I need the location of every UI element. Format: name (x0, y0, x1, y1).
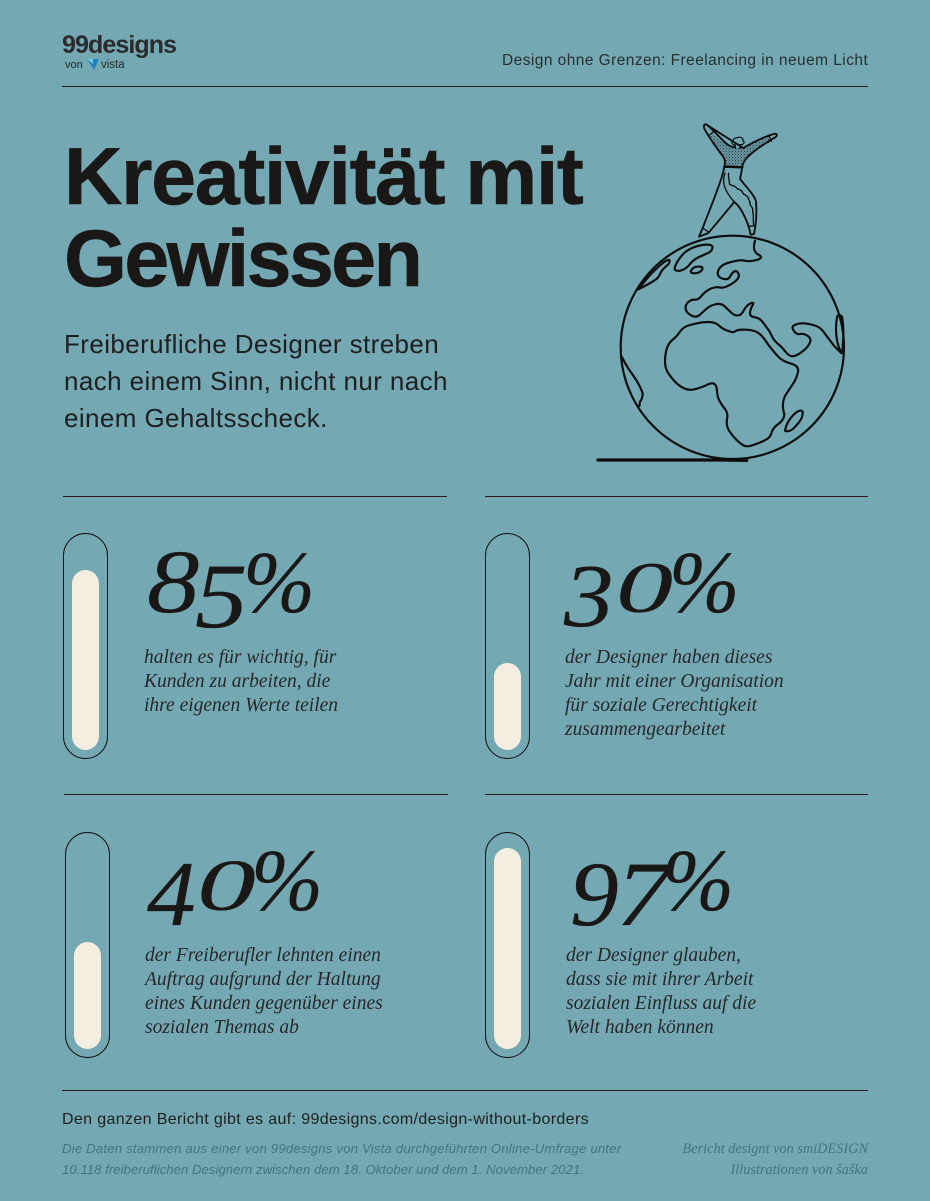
logo subline: von (65, 59, 83, 71)
logo wordmark: 99designs (62, 31, 176, 59)
progress tube 40 (65, 832, 110, 1058)
wrist bands (709, 131, 771, 141)
sweater (711, 134, 772, 167)
big number 40% (147, 831, 323, 945)
icon: vista mark (87, 59, 99, 70)
subtitle: einem Gehaltsscheck. (64, 403, 328, 433)
stat panel: 40% (64, 794, 448, 1058)
shoe lines (703, 226, 755, 232)
stat text 85: ihre eigenen Werte teilen (144, 695, 338, 716)
progress tube 30 (485, 533, 530, 759)
data source note: Die Daten stammen aus einer von 99designs von Vista durchgeführten Online-Umfrage unter (62, 1141, 621, 1156)
neck (735, 145, 740, 149)
big number 85%: 5 (195, 545, 247, 647)
subtitle: Freiberufliche Designer streben (64, 329, 439, 359)
wavy seam (728, 173, 754, 225)
progress tube 85 (63, 533, 108, 759)
figure (699, 124, 777, 237)
big number 97%: % (662, 831, 734, 929)
stat panel: 97% (485, 794, 868, 1058)
stat text 40 (144, 945, 383, 1038)
continents (622, 241, 843, 446)
data source note: 10.118 freiberuflichen Designern zwischen dem 18. Oktober und dem 1. November 2021. (62, 1162, 584, 1177)
subtitle (64, 329, 448, 433)
stat text 40: sozialen Themas ab (145, 1017, 299, 1038)
Madagascar (785, 411, 803, 431)
stat text 97 (566, 945, 756, 1038)
stat text 40: eines Kunden gegenüber eines (145, 993, 383, 1014)
Africa (665, 322, 798, 446)
hair (732, 137, 744, 145)
progress fill 30 (494, 663, 521, 750)
report link: Den ganzen Bericht gibt es auf: 99designs.com/design-without-borders (62, 1111, 589, 1128)
stat text 97: der Designer glauben, (566, 945, 741, 966)
stat text 30: zusammengearbeitet (565, 719, 725, 740)
big number 97% (570, 831, 734, 945)
big number 40%: % (251, 831, 323, 929)
stat panel: 30% (485, 496, 868, 759)
logo vista text: vista (101, 59, 125, 71)
big number 85%: % (243, 533, 315, 631)
credits (682, 1141, 868, 1178)
stat text 85 (144, 647, 338, 716)
progress tube 97 (485, 832, 530, 1058)
arms outline (704, 124, 777, 167)
credits: Bericht designt von smiDESIGN (683, 1141, 868, 1157)
Greenland (675, 245, 712, 271)
inner leg line (724, 173, 734, 202)
big number 30%: 0 (616, 548, 673, 628)
trousers (699, 167, 756, 237)
header tagline: Design ohne Grenzen: Freelancing in neuem Licht (502, 52, 868, 69)
Europe and Asia coast (686, 241, 842, 356)
waistband (724, 163, 742, 171)
progress fill 85 (72, 570, 99, 750)
stat text 30: Jahr mit einer Organisation (565, 671, 784, 692)
stat text 30: der Designer haben dieses (565, 647, 772, 668)
subtitle: nach einem Sinn, nicht nur nach (64, 366, 448, 396)
big number 97%: 7 (616, 843, 670, 945)
Asia edge island (836, 315, 843, 353)
illustration: person on globe (596, 123, 846, 462)
big number 97%: 9 (570, 843, 619, 945)
stat text 85: Kunden zu arbeiten, die (144, 671, 330, 692)
logo: 99designs von Vista (62, 31, 176, 71)
progress fill 40 (74, 942, 101, 1049)
credits: Illustrationen von šaška (730, 1162, 868, 1178)
big number 40%: 0 (197, 844, 256, 926)
big number 30% (564, 533, 740, 646)
stat text 97: sozialen Einfluss auf die (566, 993, 756, 1014)
title (64, 132, 584, 304)
stat text 97: dass sie mit ihrer Arbeit (566, 969, 753, 990)
big number 85%: 8 (147, 532, 199, 632)
big number 30%: % (669, 533, 740, 631)
title: Kreativität mit (64, 132, 582, 222)
Iceland (691, 267, 702, 273)
big number 85% (147, 532, 315, 647)
North America edge (638, 260, 670, 289)
ground line (598, 455, 747, 465)
stat text 85: halten es für wichtig, für (144, 647, 336, 668)
big number 40%: 4 (147, 843, 196, 945)
data source note (62, 1141, 622, 1177)
title: Gewissen (64, 214, 420, 304)
stat text 30: für soziale Gerechtigkeit (565, 695, 757, 716)
progress fill 97 (494, 848, 521, 1049)
stat text 40: der Freiberufler lehnten einen (145, 945, 381, 966)
globe outline (621, 236, 844, 459)
stat panel: 85% (63, 496, 447, 759)
South America edge (622, 357, 643, 406)
stat text 97: Welt haben können (566, 1017, 714, 1038)
big number 30%: 3 (564, 546, 614, 646)
stat text 40: Auftrag aufgrund der Haltung (145, 969, 381, 990)
stat text 30 (564, 647, 784, 740)
